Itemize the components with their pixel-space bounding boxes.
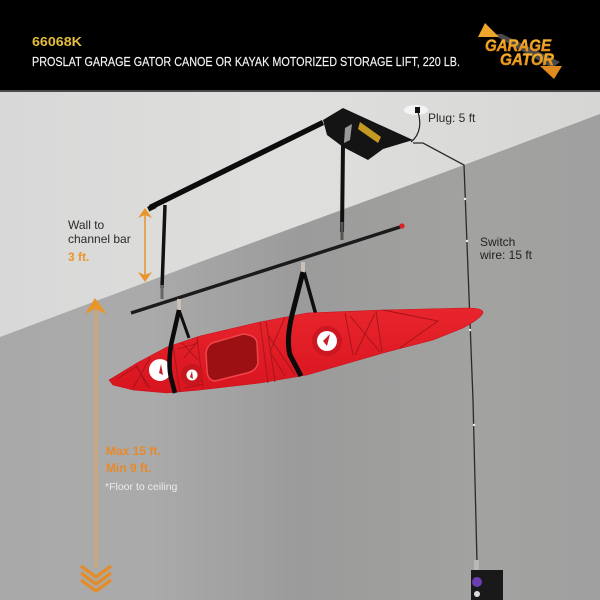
label: switch wire: Switch xyxy=(480,235,515,249)
label: height range xyxy=(105,444,178,493)
plug outlet and cord xyxy=(404,105,428,142)
kayak deck lines xyxy=(117,310,438,392)
hatch: bow xyxy=(149,359,171,381)
lift straps xyxy=(162,145,343,299)
label: height range: Max 15 ft. xyxy=(106,444,161,458)
logo: Garage Gator xyxy=(478,23,562,79)
kayak straps back legs xyxy=(177,262,316,338)
switch box xyxy=(471,560,503,600)
hatch: small xyxy=(181,364,203,386)
product code: 66068K xyxy=(32,34,83,49)
logo: Garage Gator: GATOR xyxy=(500,50,555,69)
label: height range: Min 9 ft. xyxy=(106,461,151,475)
ceiling xyxy=(0,92,600,337)
label: switch wire: wire: 15 ft xyxy=(479,248,533,262)
channel bar xyxy=(131,223,405,313)
label: switch wire xyxy=(479,235,533,262)
kayak xyxy=(109,308,483,393)
arrow: wall to channel bar xyxy=(138,208,152,282)
chevrons xyxy=(81,566,111,591)
motor unit xyxy=(323,108,413,160)
header band xyxy=(0,0,600,92)
arrow: floor to ceiling xyxy=(81,298,111,591)
label: plug: Plug: 5 ft xyxy=(428,111,476,125)
switch wire xyxy=(413,143,477,562)
logo: Garage Gator: GARAGE xyxy=(485,36,552,55)
cockpit xyxy=(206,334,258,381)
label: wall to channel bar: channel bar xyxy=(68,232,131,246)
label: wall to channel bar: 3 ft. xyxy=(68,250,89,264)
label: wall to channel bar xyxy=(68,218,131,264)
hatch: stern xyxy=(312,326,342,356)
product title: PROSLAT GARAGE GATOR CANOE OR KAYAK MOTORIZED STORAGE LIFT, 220 LB. xyxy=(32,55,460,69)
kayak straps front legs xyxy=(170,272,303,393)
label: height range: *Floor to ceiling xyxy=(105,481,178,493)
lift rail xyxy=(147,120,324,212)
label: wall to channel bar: Wall to xyxy=(68,218,105,232)
